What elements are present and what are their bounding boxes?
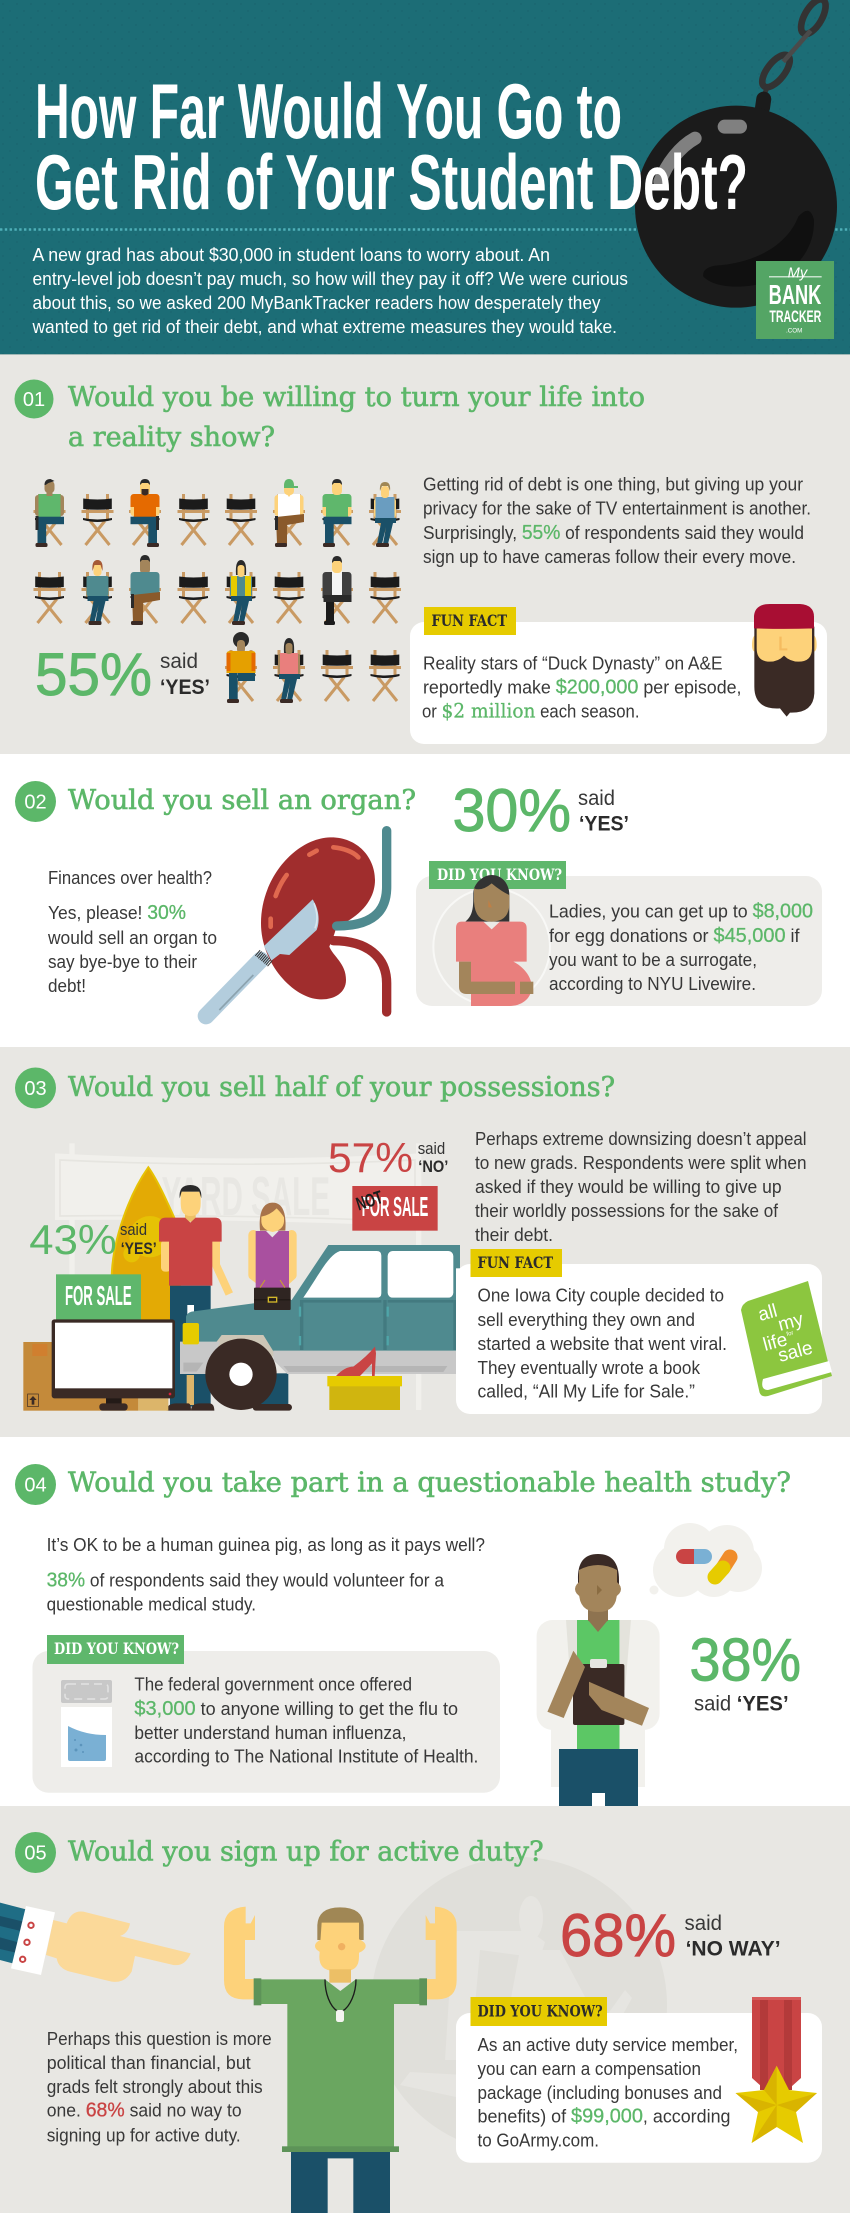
text block 1: privacy for the sake of TV entertainment is another. [423, 499, 811, 519]
text block 4: questionable medical study. [47, 1595, 256, 1615]
panel: question 3 possessions [15, 1068, 832, 1414]
text block 5: Perhaps this question is more [47, 2029, 272, 2049]
intro text: A new grad has about $30,000 in student loans to worry about. An [32, 245, 550, 265]
callout: fun fact iowa couple: They eventually wrote a book [478, 1358, 701, 1378]
stat 43 percent said yes: ‘YES’ [121, 1239, 157, 1258]
icon: book all my life for sale: for [786, 1330, 794, 1338]
text block 3: their debt. [475, 1225, 553, 1245]
stat 68 percent said no way: 68% [560, 1902, 676, 1969]
callout: did you know army pay: benefits) of $99,000, according [478, 2106, 731, 2128]
intro text: about this, so we asked 200 MyBankTracker readers how desperately they [32, 293, 600, 313]
text block 5: political than financial, but [47, 2053, 251, 2073]
callout: fun fact duck dynasty: or $2 million each season. [422, 698, 640, 722]
woman with handbag [253, 1203, 292, 1411]
icon: medal with ribbon and star [736, 1997, 817, 2143]
callout: did you know army pay: you can earn a compensation [478, 2059, 701, 2079]
text block 4 [47, 1535, 485, 1615]
stat 30 percent said yes: ‘YES’ [579, 813, 629, 836]
icon: book all my life for sale: my [776, 1309, 806, 1336]
intro text [32, 245, 628, 337]
stat 43 percent said yes: 43% [29, 1216, 117, 1263]
panel: question 1 reality show [14, 380, 827, 744]
callout: did you know flu study: The federal government once offered [134, 1675, 412, 1695]
callout: did you know egg donation [416, 861, 822, 1006]
stat 68 percent said no way [560, 1902, 781, 1969]
callout: fun fact duck dynasty [410, 607, 827, 744]
stat 57 percent said no: 57% [328, 1134, 413, 1181]
text block 4: 38% of respondents said they would volunteer for a [47, 1570, 445, 1592]
callout: fun fact iowa couple: started a website that went viral. [478, 1334, 727, 1354]
callout: did you know army pay: DID YOU KNOW? [478, 2002, 603, 2021]
logo: MyBankTracker: TRACKER [769, 307, 821, 326]
man shoes and handbag [167, 1280, 291, 1411]
icon: book all my life for sale [741, 1281, 832, 1396]
icon: pregnant woman [433, 875, 550, 1006]
intro text: wanted to get rid of their debt, and what extreme measures they would take. [32, 317, 617, 337]
callout: did you know flu study: $3,000 to anyone willing to get the flu to [134, 1698, 458, 1720]
text block 2: Yes, please! 30% [48, 902, 186, 924]
text block 3 [475, 1129, 806, 1245]
stat 43 percent said yes: said [120, 1220, 147, 1239]
title [35, 67, 748, 226]
stat 55 percent said yes [35, 641, 210, 708]
sign: not for sale: FOR SALE [362, 1191, 428, 1222]
stat 38 percent said yes: 38% [690, 1627, 801, 1694]
text block 1: sign up to have cameras follow their every move. [423, 547, 796, 567]
heading 1 [68, 382, 645, 453]
shoe box with red heel [327, 1347, 402, 1410]
text block 2 [47, 868, 217, 996]
callout: did you know army pay [456, 1997, 822, 2163]
text block 2: debt! [48, 976, 86, 996]
callout: fun fact iowa couple: FUN FACT [478, 1253, 553, 1272]
logo: MyBankTracker [756, 261, 834, 339]
callout: fun fact duck dynasty: reportedly make $200,000 per episode, [423, 676, 742, 698]
callout: did you know egg donation: Ladies, you can get up to $8,000 [549, 901, 813, 923]
stat 30 percent said yes: said [578, 787, 615, 810]
icon: book all my life for sale: all [756, 1301, 780, 1326]
callout: did you know flu study [32, 1635, 500, 1793]
text block 3: asked if they would be willing to give up [475, 1177, 782, 1197]
logo: MyBankTracker: BANK [769, 279, 821, 310]
icon: bearded man with red cap [752, 604, 817, 717]
text block 1: Getting rid of debt is one thing, but giving up your [423, 475, 803, 495]
for sale sign [56, 1274, 141, 1320]
text block 5: signing up for active duty. [47, 2126, 241, 2146]
logo: MyBankTracker: .COM [786, 328, 802, 335]
text block 3: their worldly possessions for the sake of [475, 1201, 779, 1221]
stat 57 percent said no: ‘NO’ [418, 1157, 448, 1176]
callout: did you know army pay: to GoArmy.com. [478, 2131, 599, 2151]
row 2 [34, 555, 401, 625]
callout: fun fact iowa couple: sell everything they own and [478, 1310, 695, 1330]
callout: did you know flu study: better understand human influenza, [134, 1723, 406, 1743]
for sale sign: FOR SALE [65, 1280, 132, 1311]
icon: book all my life for sale: life [761, 1329, 790, 1356]
icon: wrecking ball and chain [635, 0, 837, 308]
heading 5: Would you sign up for active duty? [68, 1837, 544, 1868]
man [159, 1185, 229, 1407]
callout: did you know egg donation: DID YOU KNOW? [437, 865, 562, 884]
badge 01: 01 [23, 389, 45, 411]
badge 03 [15, 1068, 56, 1108]
surfboard [112, 1167, 180, 1327]
badge 02 [15, 781, 56, 822]
intro text: entry-level job doesn’t pay much, so how will they pay it off? We were curious [32, 269, 628, 289]
text block 4: It’s OK to be a human guinea pig, as long as it pays well? [47, 1535, 485, 1555]
row 1 [34, 479, 401, 547]
callout: did you know flu study: according to The National Institute of Health. [134, 1747, 478, 1767]
badge 02: 02 [24, 792, 47, 814]
callout: did you know army pay: As an active duty service member, [478, 2035, 738, 2055]
text block 1 [423, 475, 811, 567]
heading 4: Would you take part in a questionable health study? [68, 1468, 791, 1499]
stat 55 percent said yes: said [160, 650, 198, 673]
text block 2: Finances over health? [48, 868, 212, 888]
sign: yard sale banner: YARD SALE [162, 1165, 330, 1227]
badge 03: 03 [24, 1078, 47, 1100]
sign: not for sale: NOT [353, 1186, 386, 1214]
callout: did you know army pay: package (including bonuses and [478, 2083, 722, 2103]
callout: fun fact duck dynasty: FUN FACT [432, 611, 507, 630]
stat 68 percent said no way: said [684, 1912, 722, 1935]
row 3 [225, 632, 401, 703]
badge 04: 04 [24, 1474, 47, 1496]
panel: question 2 organ [15, 777, 822, 1016]
text block 3: to new grads. Respondents were split when [475, 1153, 806, 1173]
sign: not for sale [352, 1186, 438, 1231]
text block 1: Surprisingly, 55% of respondents said they would [423, 522, 804, 544]
stat 57 percent said no: said [418, 1139, 445, 1158]
stat 43 percent said yes [29, 1216, 157, 1263]
callout: fun fact iowa couple: called, “All My Life for Sale.” [478, 1382, 695, 1402]
stat 57 percent said no [328, 1134, 448, 1181]
icon: thought bubble with pills [650, 1523, 762, 1597]
callout: fun fact iowa couple: One Iowa City couple decided to [478, 1286, 724, 1306]
badge 01 [14, 380, 54, 418]
callout: did you know flu study: DID YOU KNOW? [54, 1639, 179, 1658]
stat 30 percent said yes [452, 777, 629, 844]
monitor [52, 1319, 175, 1411]
heading 3: Would you sell half of your possessions? [68, 1072, 615, 1103]
icon: kidney with scalpel [206, 831, 387, 1016]
callout: fun fact iowa couple [456, 1249, 822, 1414]
callout: did you know egg donation: according to NYU Livewire. [549, 974, 756, 994]
background emblem: circle with soldier silhouette [371, 1857, 667, 2153]
illustration: young man with raised hands and dog tags [224, 1907, 457, 2213]
callout: did you know egg donation: for egg donations or $45,000 if [549, 925, 800, 947]
text block 5 [47, 2029, 272, 2146]
badge 04 [15, 1464, 56, 1505]
cardboard box [23, 1342, 168, 1411]
sign: yard sale banner [55, 1143, 421, 1410]
illustration: yard sale scene [23, 1143, 463, 1411]
car [180, 1245, 463, 1410]
stat 68 percent said no way: ‘NO WAY’ [686, 1938, 781, 1961]
stat 30 percent said yes: 30% [452, 777, 571, 844]
stat 38 percent said yes: said ‘YES’ [694, 1693, 789, 1716]
panel: question 5 active duty [0, 1832, 822, 2213]
text block 2: would sell an organ to [47, 928, 217, 948]
heading 1: Would you be willing to turn your life into [68, 382, 645, 413]
badge 05: 05 [24, 1842, 47, 1864]
badge 05 [15, 1832, 56, 1873]
panel: question 4 health study [15, 1464, 801, 1806]
illustration: doctor test subject [537, 1554, 660, 1806]
stat 55 percent said yes: ‘YES’ [160, 676, 210, 699]
heading 1: a reality show? [68, 422, 275, 453]
logo: MyBankTracker: My [788, 265, 809, 281]
icon: medicine bottle [61, 1680, 112, 1767]
callout: fun fact duck dynasty: Reality stars of “Duck Dynasty” on A&E [423, 654, 722, 674]
icon: pointing hand [0, 1903, 191, 1982]
text block 5: one. 68% said no way to [47, 2100, 242, 2122]
text block 3: Perhaps extreme downsizing doesn’t appeal [475, 1129, 806, 1149]
chart: 55 of 100 seated people, director chairs [34, 479, 401, 708]
text block 2: say bye-bye to their [48, 952, 197, 972]
callout: did you know egg donation: you want to be a surrogate, [549, 950, 757, 970]
heading 2: Would you sell an organ? [68, 785, 416, 816]
text block 5: grads felt strongly about this [47, 2077, 263, 2097]
stat 55 percent said yes: 55% [35, 641, 152, 708]
icon: book all my life for sale: sale [776, 1338, 815, 1367]
